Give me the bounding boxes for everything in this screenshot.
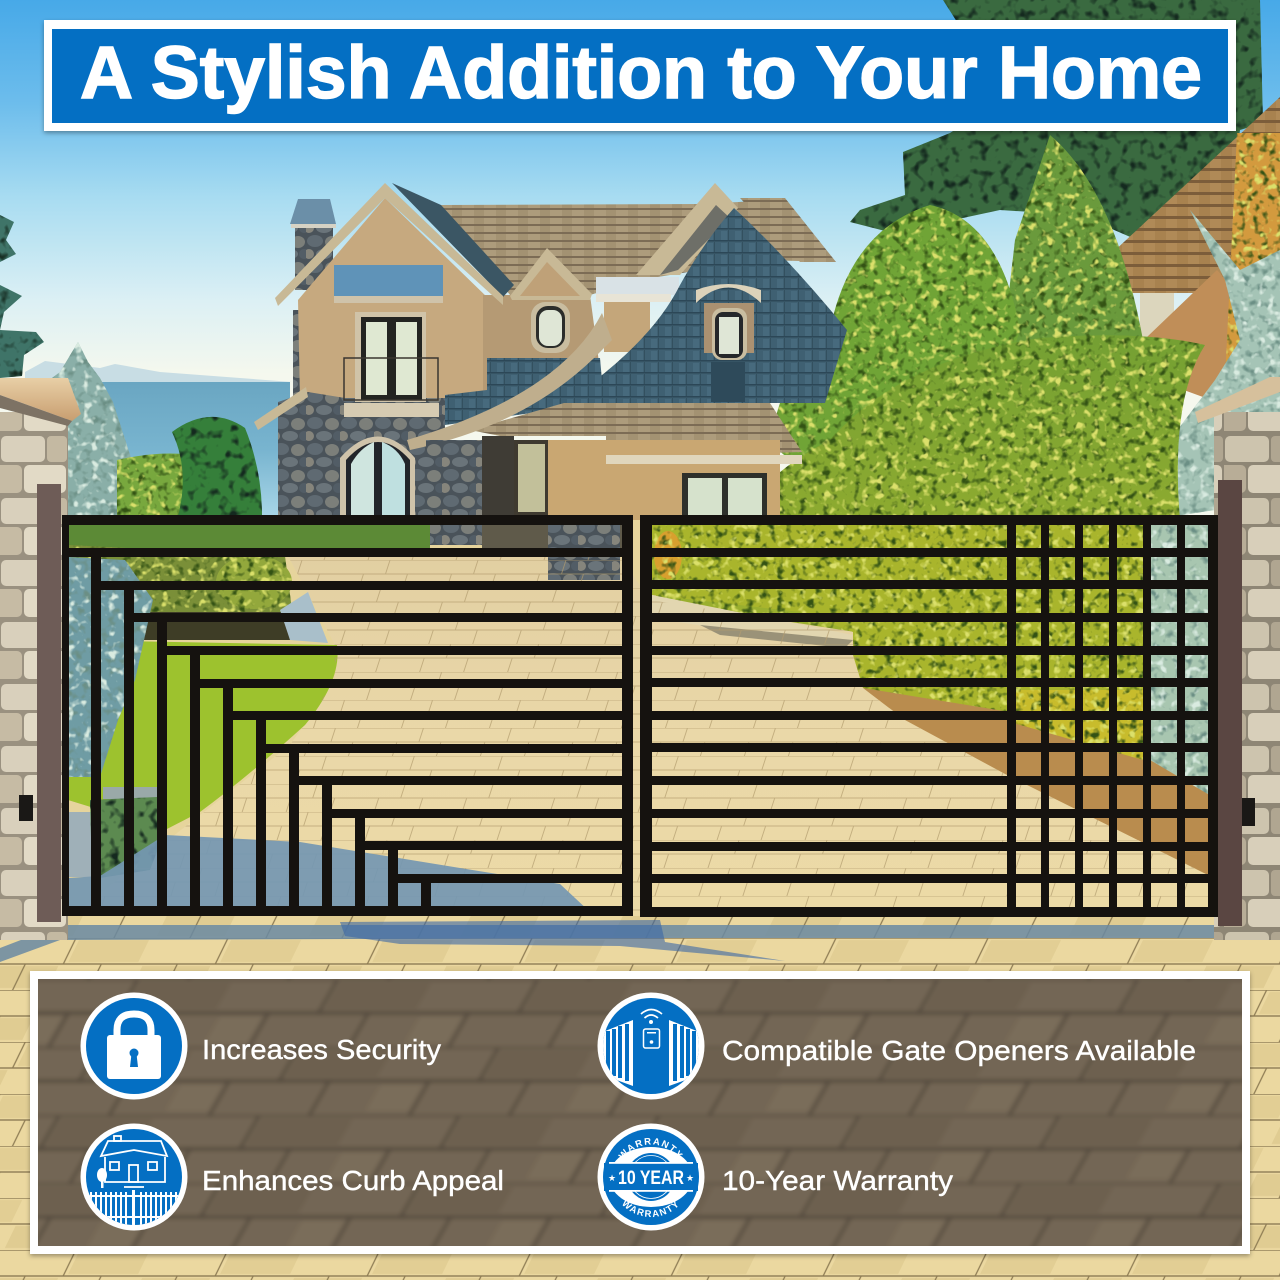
far stone pillar xyxy=(548,525,620,580)
house xyxy=(254,183,847,545)
photo background: sky and sea xyxy=(0,0,1280,520)
icon: house with fence xyxy=(80,1124,188,1230)
left stucco gable xyxy=(275,183,604,400)
stone pillar: right xyxy=(1195,377,1280,940)
gate shadow band xyxy=(0,925,1240,962)
bushes behind right gate xyxy=(652,525,1215,712)
panel paver background xyxy=(28,969,1252,1256)
blue slate turret roof xyxy=(564,208,847,403)
icon: padlock xyxy=(80,992,188,1100)
background trees and roofs, right xyxy=(650,0,1280,720)
gate shadow on driveway xyxy=(68,835,590,912)
stone pillar: left xyxy=(0,378,81,940)
icon: ten year warranty seal: ★ xyxy=(686,1173,694,1183)
label: compatible gate openers: Compatible Gate Openers Available xyxy=(722,1035,1196,1066)
shrubs and mulch xyxy=(68,545,328,643)
main tan roof xyxy=(441,200,836,295)
hedge strip xyxy=(68,518,430,556)
title banner xyxy=(44,20,1236,131)
foreground paving xyxy=(0,916,1280,1280)
arched window xyxy=(340,436,415,515)
tree shadow on paving xyxy=(340,920,785,961)
lower left stone and shrub xyxy=(68,787,165,878)
lawn xyxy=(68,640,338,830)
wooden gate post: right xyxy=(1218,480,1255,926)
title: A Stylish Addition to Your Home xyxy=(80,31,1202,114)
stucco column xyxy=(604,302,650,352)
stone gable xyxy=(636,183,738,275)
shaded entry behind gate xyxy=(482,518,622,556)
chimney xyxy=(290,199,336,400)
driveway paver texture xyxy=(60,556,1218,925)
small dormer xyxy=(510,248,592,353)
icon: ten year warranty seal: ★ xyxy=(608,1173,616,1183)
left gate leaf: stepped bar design xyxy=(62,515,633,916)
right gate leaf: grid design xyxy=(640,515,1218,917)
stone base xyxy=(278,392,445,515)
wooden gate post: left xyxy=(19,484,61,922)
icon: ten year warranty seal: 10 YEAR xyxy=(618,1167,684,1189)
retaining wall xyxy=(652,595,853,648)
slate lower roofs xyxy=(445,358,604,425)
mulch bed xyxy=(863,688,1218,880)
blue spruce behind grid xyxy=(1150,515,1218,800)
metal roof xyxy=(596,277,679,302)
label: increases security: Increases Security xyxy=(202,1034,441,1065)
sweeping eave xyxy=(407,313,612,450)
lower stucco and entry xyxy=(426,436,802,545)
turret dormer xyxy=(696,284,761,402)
awning xyxy=(334,265,443,303)
icon: ten year warranty seal: WARRANTY xyxy=(622,1200,678,1218)
lower tan roof xyxy=(470,403,802,458)
driveway xyxy=(60,556,1218,925)
landscaped ground behind gate xyxy=(60,515,1218,925)
orange shrub xyxy=(654,531,682,579)
left lower eave xyxy=(254,387,308,430)
feature panel xyxy=(27,970,1253,1259)
label: ten year warranty: 10-Year Warranty xyxy=(722,1165,953,1196)
label: enhances curb appeal: Enhances Curb Appeal xyxy=(202,1165,504,1196)
icon: gate opener with remote xyxy=(598,992,704,1100)
background trees, left xyxy=(0,215,262,800)
upper window and balcony xyxy=(344,312,439,417)
icon: ten year warranty seal: WARRANTY xyxy=(618,1138,683,1157)
spruce through gate xyxy=(68,557,153,777)
icon: ten year warranty seal xyxy=(598,1124,704,1230)
